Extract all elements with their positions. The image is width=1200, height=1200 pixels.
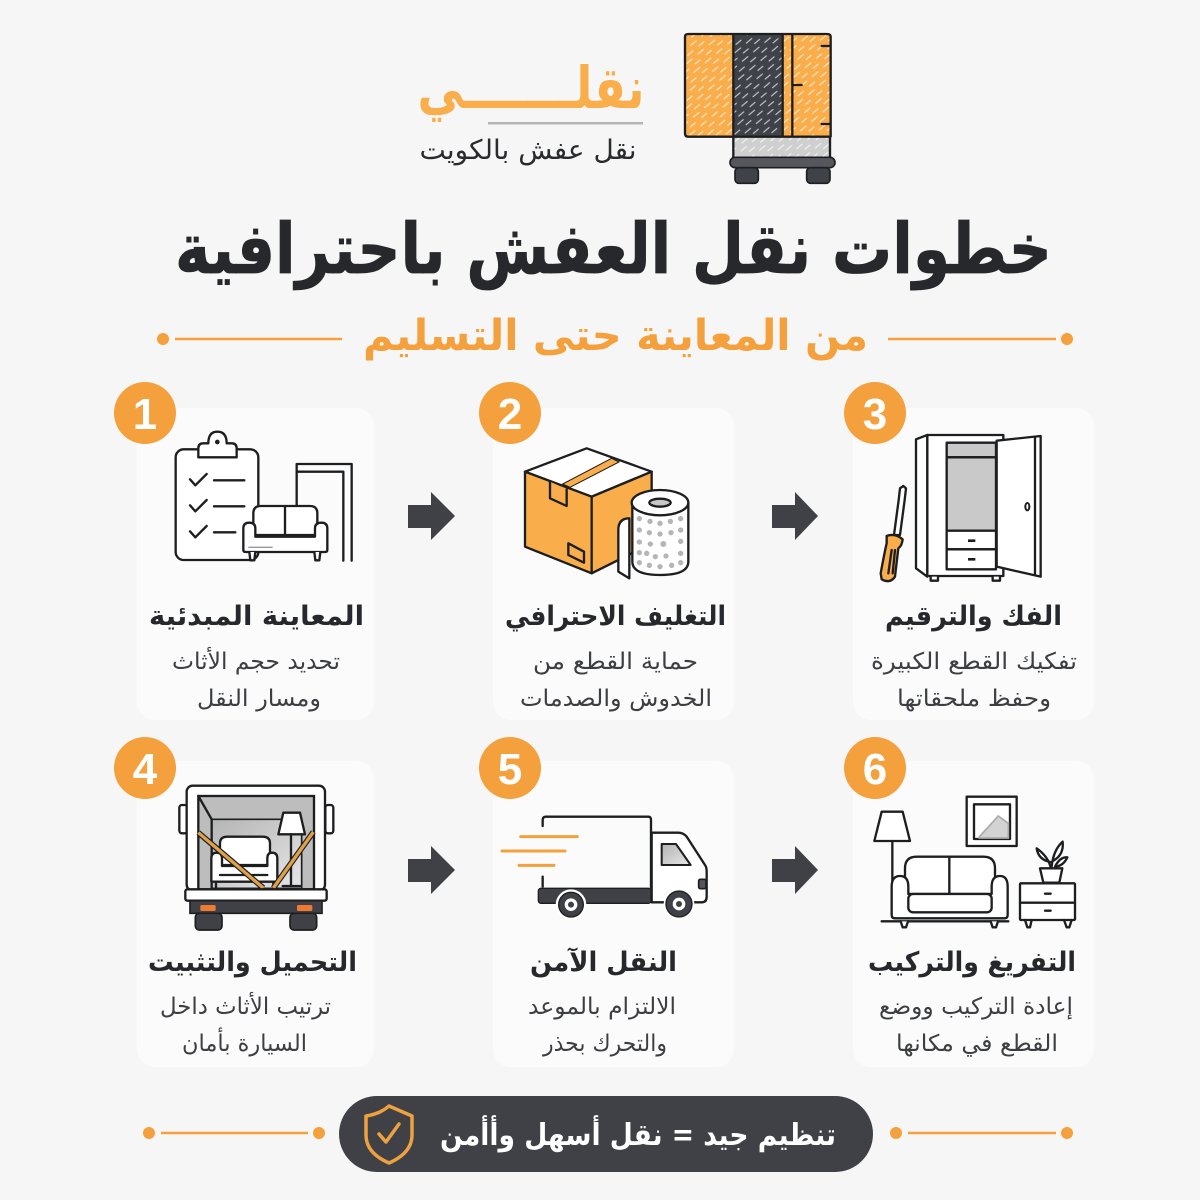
step 5 description: الالتزام بالموعد	[528, 994, 676, 1020]
icon: moving truck	[502, 817, 707, 920]
arrow 2 to 3	[772, 492, 818, 540]
step 5 description	[528, 994, 676, 1057]
subtitle text: من المعاينة حتى التسليم	[363, 311, 868, 361]
card panel 3	[853, 408, 1094, 720]
step 3 description: وحفظ ملحقاتها	[897, 686, 1051, 712]
number badge 3	[844, 382, 906, 444]
step 2 description: الخدوش والصدمات	[520, 686, 712, 712]
icon: living room	[874, 797, 1075, 927]
step 2 heading: التغليف الاحترافي	[505, 601, 726, 632]
step 4 description: السيارة بأمان	[182, 1027, 307, 1057]
card panel 1	[137, 408, 374, 720]
footer pill	[339, 1096, 873, 1172]
logo rule	[488, 122, 643, 124]
footer text: تنظيم جيد = نقل أسهل وأأمن	[440, 1115, 836, 1153]
step 2 card	[479, 382, 734, 720]
number badge 3: 3	[863, 390, 887, 439]
step 2 description	[520, 649, 712, 712]
step 5 card	[479, 737, 734, 1067]
icon: box and bubble wrap	[525, 448, 688, 578]
number badge 6	[844, 737, 906, 799]
step 6 description: القطع في مكانها	[896, 1031, 1058, 1057]
number badge 4	[114, 737, 176, 799]
step 4 heading: التحميل والتثبيت	[148, 947, 357, 978]
number badge 1	[114, 382, 176, 444]
number badge 5: 5	[498, 745, 522, 794]
number badge 2: 2	[498, 390, 522, 439]
logo wordmark	[418, 54, 644, 166]
step 3 description: تفكيك القطع الكبيرة	[871, 649, 1077, 675]
step 3 description	[871, 649, 1077, 712]
footer decoration left	[143, 1127, 325, 1139]
logo tagline: نقل عفش بالكويت	[420, 135, 636, 166]
step 2 description: حماية القطع من	[533, 649, 698, 675]
step 5 description: والتحرك بحذر	[542, 1031, 667, 1057]
footer decoration right	[890, 1127, 1073, 1139]
step 1 card	[114, 382, 374, 720]
icon: loaded truck rear	[179, 786, 333, 930]
step 1 description	[172, 647, 340, 712]
step 6 card	[844, 737, 1094, 1067]
step 3 heading: الفك والترقيم	[885, 601, 1062, 632]
number badge 6: 6	[863, 745, 887, 794]
title: خطوات نقل العفش باحترافية	[175, 208, 1052, 290]
icon: wardrobe and screwdriver	[881, 435, 1041, 581]
card panel 4	[137, 761, 374, 1067]
icon: shield check	[366, 1106, 412, 1163]
step 3 card	[844, 382, 1094, 720]
arrow 1 to 2	[408, 492, 455, 540]
step 1 description: تحديد حجم الأثاث	[172, 647, 340, 675]
step 6 description: إعادة التركيب ووضع	[879, 994, 1073, 1020]
step 4 description: ترتيب الأثاث داخل	[160, 992, 331, 1020]
step 6 description	[879, 994, 1073, 1057]
card panel 2	[493, 408, 734, 720]
step 1 description: ومسار النقل	[197, 686, 321, 712]
step 1 heading: المعاينة المبدئية	[149, 601, 364, 632]
subtitle with decorative lines	[157, 311, 1073, 361]
card panel 6	[853, 761, 1094, 1067]
arrow 5 to 6	[772, 846, 818, 894]
card panel 5	[493, 761, 734, 1067]
step 4 card	[114, 737, 374, 1067]
step 5 heading: النقل الآمن	[530, 947, 677, 978]
logo icon: truck rear	[685, 34, 835, 183]
icon: clipboard and sofa	[176, 432, 352, 561]
arrow 4 to 5	[408, 846, 455, 894]
brand name: نقلـــــــي	[418, 54, 644, 122]
step 6 heading: التفريغ والتركيب	[868, 947, 1076, 978]
step 4 description	[160, 992, 331, 1057]
number badge 5	[479, 737, 541, 799]
number badge 1: 1	[133, 390, 157, 439]
number badge 4: 4	[133, 745, 158, 794]
number badge 2	[479, 382, 541, 444]
